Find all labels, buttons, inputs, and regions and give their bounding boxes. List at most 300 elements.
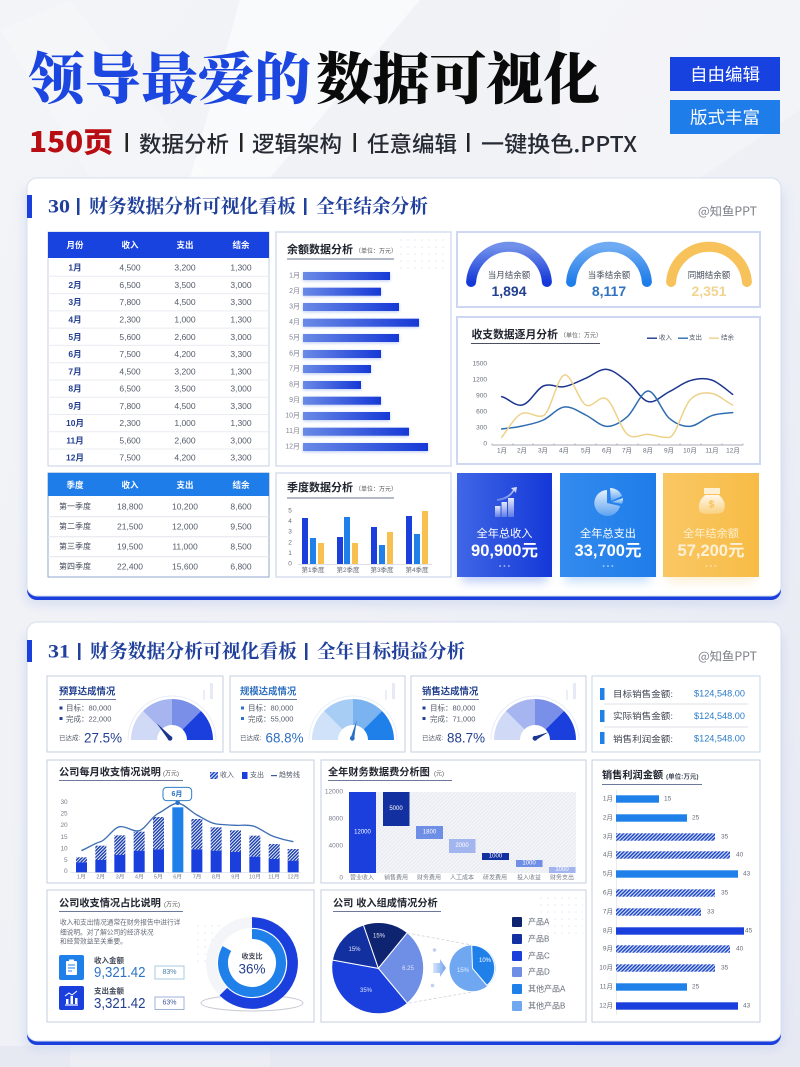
subtitle: 数据分析 <box>139 127 229 159</box>
gauge: 当季结余额 <box>571 247 647 299</box>
panel: balance bar chart: 4月 <box>289 318 300 326</box>
panel: revenue composition: 公司 收入组成情况分析 <box>333 896 438 910</box>
table: quarterly: 10,200 <box>172 502 198 512</box>
panel: balance bar chart: 5月 <box>289 334 300 342</box>
panel: scale gauge: 已达成: <box>240 733 262 742</box>
panel: sales totals: $124,548.00 <box>694 688 745 700</box>
table: monthly: 9月 <box>68 401 82 411</box>
panel: profit bar chart: 25 <box>692 814 700 822</box>
title: 领导最爱的 <box>28 50 311 112</box>
gauge: 同期结余额: 同期结余额 <box>688 270 731 280</box>
legend: 产品B <box>528 934 549 944</box>
table: quarterly: 支出 <box>176 480 194 490</box>
KPI card: 全年总支出: 全年总支出 <box>580 525 636 541</box>
icon: money bag: $ <box>709 500 715 510</box>
panel: income-expense ratio: 3,321.42 <box>94 996 146 1012</box>
table: monthly: 3,000 <box>230 384 252 394</box>
table: quarterly <box>48 473 269 577</box>
panel: profit bar chart: 6月 <box>603 888 613 896</box>
legend <box>512 916 566 1011</box>
table: quarterly: 18,800 <box>117 502 143 512</box>
panel: monthly line chart: 7月 <box>622 446 632 454</box>
table: monthly: 收入 <box>121 240 139 250</box>
panel: sales totals: $124,548.00 <box>694 734 745 744</box>
panel: profit bar chart: 5月 <box>603 870 613 878</box>
table: quarterly: 9,500 <box>230 522 252 532</box>
KPI card: 全年结余额: 57,200元 <box>678 542 744 560</box>
table: monthly: 2,600 <box>174 435 196 445</box>
KPI card: 全年结余额: 全年结余额 <box>683 525 739 541</box>
panel: monthly stacked bars: 11月 <box>268 873 280 880</box>
panel: monthly stacked bars: (万元) <box>163 770 179 778</box>
panel: waterfall chart: (元) <box>434 770 444 778</box>
panel: profit bar chart: 销售利润金额 <box>602 768 663 782</box>
panel: income-expense ratio: (万元) <box>164 902 180 908</box>
legend: 收入 <box>659 332 672 342</box>
connector <box>407 933 472 1003</box>
legend: 产品D <box>528 966 550 976</box>
panel: monthly stacked bars: 30 <box>60 799 68 806</box>
panel: monthly line chart: 1月 <box>497 446 507 454</box>
table: quarterly: 19,500 <box>117 542 143 552</box>
gauge: 当月结余额: 当月结余额 <box>488 270 531 280</box>
gauge: 同期结余额 <box>671 247 747 299</box>
panel: sales gauge: 目标：80,000 <box>430 702 475 712</box>
panel: profit bar chart: 9月 <box>603 944 613 952</box>
table: monthly: 7月 <box>68 366 82 376</box>
small pie chart: 15% <box>457 968 470 974</box>
table: monthly: 3,200 <box>174 263 196 273</box>
gauge chart <box>491 696 579 740</box>
table: monthly: 5,600 <box>119 435 141 445</box>
panel: monthly line chart: 8月 <box>643 446 653 454</box>
heading: dashboard 31: 31 <box>48 642 70 662</box>
table: quarterly: 6,800 <box>230 562 252 572</box>
panel: revenue composition: 35% <box>360 988 373 994</box>
panel: quarterly bar chart: 3 <box>288 529 292 536</box>
panel: waterfall chart: 12000 <box>325 788 343 796</box>
panel: monthly stacked bars: 9月 <box>231 873 240 880</box>
legend: 结余 <box>721 332 734 342</box>
icon: pie <box>594 488 623 516</box>
panel: monthly stacked bars: 0 <box>64 868 68 875</box>
panel: budget gauge: 预算达成情况 <box>59 686 116 696</box>
panel: monthly line chart: 1200 <box>473 376 487 384</box>
panel: sales gauge <box>411 676 586 752</box>
panel: waterfall chart: 4000 <box>329 842 343 850</box>
panel: sales gauge: 88.7% <box>447 730 485 746</box>
table: monthly: 2,300 <box>119 314 141 324</box>
table: quarterly: 22,400 <box>117 562 143 572</box>
panel: monthly line chart: 4月 <box>559 446 569 454</box>
subtitle <box>29 121 637 161</box>
table: quarterly: 第二季度 <box>59 521 91 531</box>
legend <box>210 770 300 779</box>
panel: waterfall chart: 1800 <box>423 830 437 836</box>
panel: monthly stacked bars: 20 <box>60 822 68 829</box>
panel: sales totals: 目标销售金额: <box>613 689 673 699</box>
panel: scale gauge: 68.8% <box>266 730 304 746</box>
heading: dashboard 30: 30 <box>48 196 70 218</box>
panel: income-expense ratio: 9,321.42 <box>94 965 146 981</box>
subtitle: 逻辑架构 <box>252 127 342 159</box>
panel: balance bar chart <box>276 232 451 466</box>
gauge: 当季结余额: 当季结余额 <box>588 270 631 280</box>
panel: quarterly bar chart: 第4季度 <box>405 565 429 574</box>
table: monthly: 7,800 <box>119 297 141 307</box>
legend: 产品A <box>528 916 550 926</box>
panel: quarterly bar chart <box>276 473 451 577</box>
table: quarterly: 12,000 <box>172 522 198 532</box>
panel: quarterly bar chart: 0 <box>288 560 292 568</box>
heading: dashboard 30 <box>27 194 428 218</box>
table: monthly: 4,500 <box>119 366 141 376</box>
table: quarterly: 11,000 <box>172 542 198 552</box>
panel: quarterly bar chart: 2 <box>288 539 292 546</box>
table: monthly: 1,000 <box>174 418 196 428</box>
panel: waterfall chart: 2000 <box>455 843 469 849</box>
table: monthly: 3,300 <box>230 349 252 359</box>
panel: profit bar chart: 33 <box>707 908 715 916</box>
panel: profit bar chart: 1月 <box>603 794 613 802</box>
tag: 83%: 83% <box>162 969 177 976</box>
panel: monthly stacked bars: 5 <box>64 857 68 864</box>
icon: growth chart <box>59 986 84 1010</box>
panel: scale gauge: 完成：55,000 <box>248 714 293 724</box>
table: monthly: 5,600 <box>119 332 141 342</box>
panel: scale gauge: 目标：80,000 <box>248 702 293 712</box>
panel: monthly line chart: 2月 <box>517 446 527 454</box>
panel: monthly line chart: （单位：万元） <box>560 332 602 340</box>
panel: waterfall chart: 12000 <box>354 830 372 836</box>
heading: dashboard 30: 全年结余分析 <box>316 194 428 218</box>
panel: monthly stacked bars: 3月 <box>116 873 124 880</box>
panel: budget gauge: 目标：80,000 <box>66 702 111 712</box>
table: monthly: 结余 <box>232 240 250 250</box>
heading: dashboard 31 <box>27 640 465 662</box>
panel: monthly stacked bars: 6月 <box>173 873 182 880</box>
needle <box>533 732 548 741</box>
panel: waterfall chart <box>321 760 586 883</box>
panel: monthly line chart: 3月 <box>538 446 548 454</box>
table: monthly: 4,500 <box>119 263 141 273</box>
button: 版式丰富: 版式丰富 <box>690 104 760 128</box>
panel: monthly line chart: 9月 <box>664 446 674 454</box>
panel: profit bar chart <box>592 760 760 1022</box>
gauge chart <box>309 696 397 740</box>
panel: income-expense ratio: 收入金额 <box>94 955 124 965</box>
panel: monthly stacked bars: 15 <box>60 834 68 841</box>
panel: monthly stacked bars: 2月 <box>96 873 105 880</box>
table: monthly: 6月 <box>68 349 82 359</box>
table: quarterly: 8,500 <box>230 542 252 552</box>
panel: waterfall chart: 5000 <box>389 806 403 812</box>
panel: monthly line chart: 0 <box>483 440 487 448</box>
button: 自由编辑: 自由编辑 <box>690 60 760 86</box>
legend: 其他产品A <box>528 984 566 994</box>
table: quarterly: 第三季度 <box>59 541 91 551</box>
table: monthly: 6,500 <box>119 384 141 394</box>
panel: revenue composition: 15% <box>373 934 386 940</box>
panel: scale gauge: 规模达成情况 <box>240 686 297 696</box>
panel: income-expense ratio: 公司收支情况占比说明 <box>59 896 161 910</box>
panel: monthly stacked bars <box>47 760 314 883</box>
panel: profit bar chart: 45 <box>745 928 753 934</box>
panel: monthly line chart: 5月 <box>581 446 591 454</box>
table: quarterly: 第一季度 <box>59 501 91 511</box>
table: monthly: 1,000 <box>174 314 196 324</box>
panel: profit bar chart: 15 <box>664 796 672 802</box>
panel: balance gauges <box>457 232 760 307</box>
table: monthly: 3,000 <box>230 332 252 342</box>
donut chart: 36% <box>238 962 266 976</box>
panel: monthly line chart: 6月 <box>602 446 612 454</box>
panel: waterfall chart: 销售费用 <box>384 874 408 882</box>
gauge: 当月结余额 <box>471 247 547 299</box>
panel: quarterly bar chart: 4 <box>288 518 292 525</box>
legend: 收入 <box>220 770 234 779</box>
panel: quarterly bar chart: 第2季度 <box>336 565 360 574</box>
table: monthly: 4,200 <box>174 453 196 463</box>
panel: monthly line chart: 12月 <box>726 446 740 454</box>
panel: revenue composition: 15% <box>348 947 361 953</box>
table: monthly: 12月 <box>66 453 84 463</box>
panel: sales gauge: 销售达成情况 <box>422 686 479 696</box>
heading: dashboard 30: 财务数据分析可视化看板 <box>89 194 296 218</box>
pie chart <box>332 922 424 1014</box>
table: monthly: 3,000 <box>230 280 252 290</box>
panel: monthly line chart: 600 <box>476 408 487 416</box>
table: monthly: 3,200 <box>174 366 196 376</box>
panel: quarterly bar chart: （单位：万元） <box>355 485 397 493</box>
legend: 支出 <box>689 332 702 342</box>
table: monthly: 4,500 <box>174 297 196 307</box>
table: quarterly: 21,500 <box>117 522 143 532</box>
tag: 83% <box>155 966 184 979</box>
panel: profit bar chart: 35 <box>721 890 729 896</box>
panel: waterfall chart: 8000 <box>329 816 343 822</box>
heading: dashboard 31: 全年目标损益分析 <box>317 640 465 662</box>
table: monthly: 3,500 <box>174 384 196 394</box>
legend: 产品C <box>528 950 550 960</box>
panel: waterfall chart: 财务费用 <box>417 874 441 882</box>
panel: waterfall chart: 0 <box>339 874 343 882</box>
panel: monthly line chart: 11月 <box>705 446 719 454</box>
panel: quarterly bar chart: 5 <box>288 508 292 514</box>
panel: quarterly bar chart: 第3季度 <box>370 565 394 574</box>
table: monthly: 1,300 <box>230 263 252 273</box>
callout: 6月 <box>163 787 192 801</box>
watermark: @知鱼PPT <box>698 202 757 220</box>
donut chart <box>195 917 303 1011</box>
table: monthly: 月份 <box>66 240 84 250</box>
panel: balance bar chart: 11月 <box>286 427 300 435</box>
KPI card: 全年总支出 <box>560 473 656 582</box>
description: 细说明。对了解公司的经济状况 <box>60 928 154 936</box>
table: monthly: 4,500 <box>174 401 196 411</box>
gauge chart <box>128 696 216 740</box>
gauge: 当季结余额: 8,117 <box>592 283 626 299</box>
table: monthly: 6,500 <box>119 280 141 290</box>
description <box>60 918 181 946</box>
table: monthly: 支出 <box>176 240 194 250</box>
panel: sales gauge: 已达成: <box>422 733 444 742</box>
panel: sales totals: $124,548.00 <box>694 711 745 722</box>
table: monthly: 4月 <box>68 314 82 324</box>
panel: waterfall chart: 营业收入 <box>350 874 374 882</box>
panel: monthly stacked bars: 10月 <box>249 873 261 880</box>
KPI card: 全年结余额: • • • <box>705 564 717 570</box>
needle <box>157 723 172 741</box>
panel: profit bar chart: 4月 <box>603 850 613 858</box>
panel: sales totals: 实际销售金额: <box>613 711 673 721</box>
panel: waterfall chart: 1000 <box>555 867 569 873</box>
subtitle: 一键换色.PPTX <box>481 127 637 159</box>
KPI card: 全年结余额 <box>663 473 759 582</box>
description: 和经营效益至关重要。 <box>60 936 127 946</box>
legend: 其他产品B <box>528 1000 565 1010</box>
panel: monthly line chart: 300 <box>476 424 487 432</box>
legend: 趋势线 <box>279 770 300 779</box>
panel: sales totals <box>592 676 760 752</box>
small pie chart: 10% <box>479 958 492 964</box>
panel: profit bar chart: 40 <box>736 852 744 858</box>
panel: profit bar chart: 35 <box>721 964 729 972</box>
table: monthly: 3,300 <box>230 297 252 307</box>
table: monthly: 2月 <box>68 280 82 290</box>
panel: balance bar chart: 10月 <box>285 412 300 420</box>
panel: revenue composition <box>321 890 586 1022</box>
panel: profit bar chart: 40 <box>736 946 744 952</box>
needle <box>350 720 357 741</box>
gauge: 当月结余额: 1,894 <box>491 283 527 299</box>
icon: clipboard <box>59 955 84 980</box>
panel: profit bar chart: 12月 <box>599 1002 613 1010</box>
small pie chart <box>450 945 496 991</box>
table: monthly: 2,600 <box>174 332 196 342</box>
table: monthly: 7,500 <box>119 349 141 359</box>
panel: monthly stacked bars: 1月 <box>77 873 86 880</box>
table: quarterly: 8,600 <box>230 502 252 512</box>
panel: budget gauge: 完成：22,000 <box>66 714 111 724</box>
KPI card: 全年总收入: 90,900元 <box>471 542 538 560</box>
table: monthly <box>48 232 269 466</box>
panel: monthly line chart <box>457 317 760 464</box>
table: monthly: 3,300 <box>230 453 252 463</box>
panel: sales gauge: 完成：71,000 <box>430 714 475 724</box>
panel: sales totals: 销售利润金额: <box>613 734 673 744</box>
panel: monthly stacked bars: 4月 <box>135 873 144 880</box>
arrow <box>431 948 446 987</box>
panel: budget gauge: 27.5% <box>84 730 122 746</box>
table: monthly: 1月 <box>68 263 82 273</box>
table: monthly: 2,300 <box>119 418 141 428</box>
title <box>28 50 600 112</box>
panel: monthly stacked bars: 25 <box>60 810 68 817</box>
table: monthly: 3月 <box>68 297 82 307</box>
legend: 支出 <box>250 770 264 779</box>
panel: monthly line chart: 1500 <box>473 360 487 368</box>
panel: profit bar chart: 2月 <box>603 814 613 822</box>
button: 版式丰富 <box>670 100 780 134</box>
panel: balance bar chart: 1月 <box>289 272 300 280</box>
panel: monthly line chart: 收支数据逐月分析 <box>472 327 558 341</box>
panel: profit bar chart: 10月 <box>599 964 613 972</box>
panel: profit bar chart: (单位:万元) <box>666 772 698 780</box>
panel: profit bar chart: 8月 <box>603 926 613 934</box>
KPI card: 全年总收入 <box>457 473 552 582</box>
table: monthly: 3,500 <box>174 280 196 290</box>
panel: balance bar chart: 7月 <box>289 364 300 372</box>
panel: balance bar chart: 3月 <box>289 302 300 310</box>
panel: monthly stacked bars: 公司每月收支情况说明 <box>59 766 161 778</box>
panel: monthly stacked bars: 7月 <box>193 873 201 880</box>
panel: waterfall chart: 财务支出 <box>550 874 574 882</box>
panel: waterfall chart: 全年财务数据费分析图 <box>328 766 430 778</box>
panel: balance bar chart: 6月 <box>289 350 300 358</box>
panel: waterfall chart: 1000 <box>522 860 536 866</box>
table: monthly: 4,200 <box>174 349 196 359</box>
table: quarterly: 结余 <box>232 480 250 490</box>
panel: quarterly bar chart: 季度数据分析 <box>287 480 353 494</box>
legend <box>647 332 734 342</box>
table: quarterly: 第四季度 <box>59 561 91 571</box>
tag: 63%: 63% <box>162 1000 177 1006</box>
table: quarterly: 季度 <box>66 480 84 490</box>
gauge: 同期结余额: 2,351 <box>691 283 727 299</box>
KPI card: 全年总支出: 33,700元 <box>575 542 641 560</box>
table: monthly: 11月 <box>66 435 84 445</box>
panel: waterfall chart: 研发费用 <box>483 874 507 882</box>
panel: budget gauge: 已达成: <box>59 733 80 742</box>
subtitle: 150页 <box>29 121 113 161</box>
button: 自由编辑 <box>670 57 780 91</box>
heading: dashboard 31: 财务数据分析可视化看板 <box>90 640 297 662</box>
table: quarterly: 15,600 <box>172 562 198 572</box>
table: monthly: 3,300 <box>230 401 252 411</box>
panel: income-expense ratio <box>47 890 314 1022</box>
description: 收入和支出情况通常在财务报告中进行详 <box>60 918 181 926</box>
table: monthly: 8月 <box>68 384 82 394</box>
subtitle: 任意编辑 <box>367 127 457 159</box>
panel: budget gauge <box>47 676 223 752</box>
panel: profit bar chart: 7月 <box>603 908 613 916</box>
tag: 63% <box>155 997 184 1010</box>
table: monthly: 1,300 <box>230 418 252 428</box>
table: monthly: 1,300 <box>230 314 252 324</box>
callout: 6月: 6月 <box>172 790 182 798</box>
panel: monthly line chart: 10月 <box>683 446 697 454</box>
table: monthly: 7,800 <box>119 401 141 411</box>
panel: balance bar chart: 9月 <box>289 396 300 404</box>
panel: monthly stacked bars: 5月 <box>154 873 163 880</box>
panel: revenue composition: 6.25 <box>402 966 414 972</box>
panel: balance bar chart: （单位：万元） <box>355 247 397 255</box>
table: monthly: 1,300 <box>230 366 252 376</box>
title: 数据可视化 <box>316 50 600 112</box>
panel: profit bar chart: 3月 <box>603 832 613 840</box>
panel: balance bar chart: 12月 <box>285 442 300 450</box>
panel: monthly line chart: 900 <box>476 392 487 400</box>
panel: income-expense ratio: 支出金额 <box>94 986 124 996</box>
panel: profit bar chart: 35 <box>721 834 729 840</box>
KPI card: 全年总收入: 全年总收入 <box>476 525 532 541</box>
panel: scale gauge <box>230 676 405 752</box>
panel: quarterly bar chart: 第1季度 <box>301 565 325 574</box>
panel: waterfall chart: 投入收益 <box>517 874 541 882</box>
panel: waterfall chart: 人工成本 <box>450 874 474 882</box>
panel: monthly stacked bars: 12月 <box>287 873 299 880</box>
